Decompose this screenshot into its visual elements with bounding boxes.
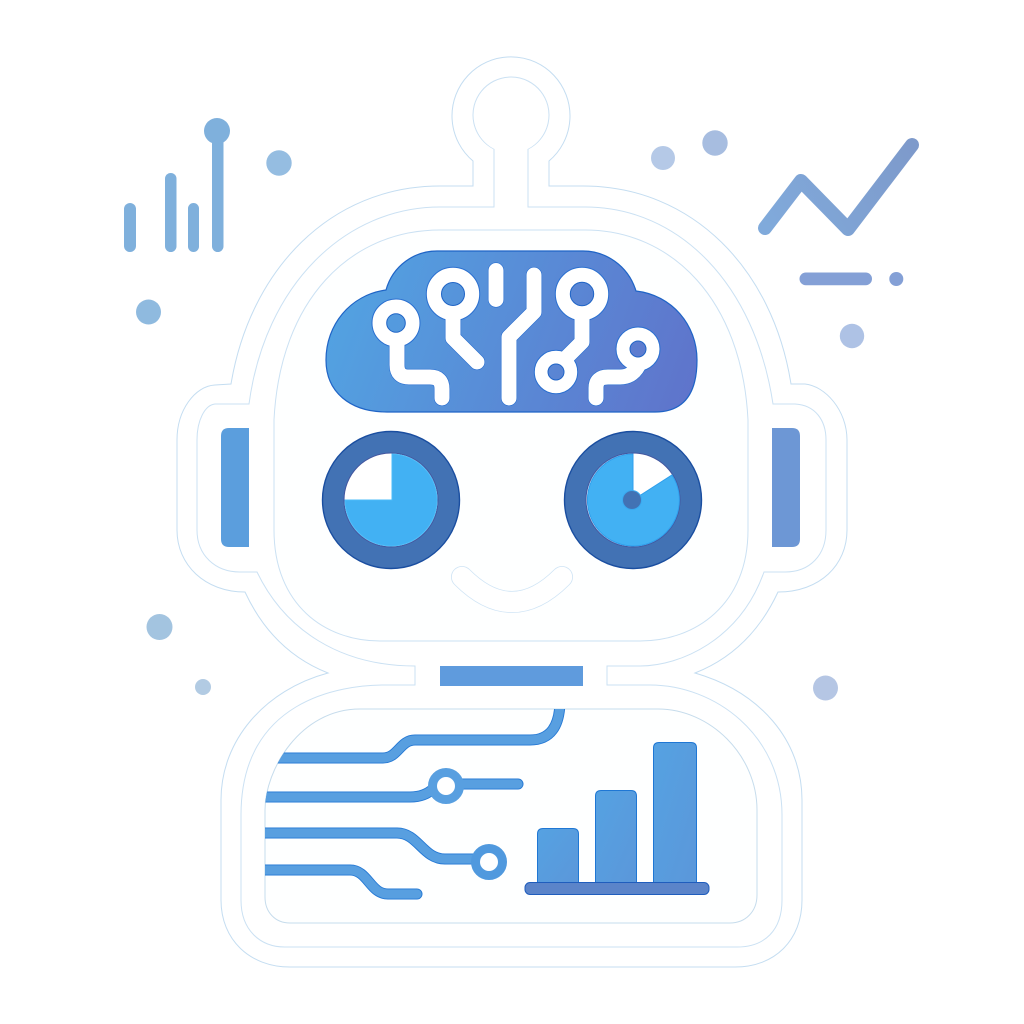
brain with circuit traces <box>326 251 697 412</box>
brain cloud shape <box>326 251 697 412</box>
signal bar 3 <box>188 203 199 252</box>
bar 3 <box>654 742 696 883</box>
circuit line edges <box>250 700 560 894</box>
right eye pie slice <box>587 454 679 546</box>
dot top right 1 <box>651 146 675 170</box>
dot top left <box>266 150 292 176</box>
small dot <box>889 272 903 286</box>
body panel <box>265 709 757 923</box>
right eye dial <box>586 453 680 547</box>
left eye dial <box>344 453 438 547</box>
smile <box>462 577 562 602</box>
dot top right 2 <box>702 130 728 156</box>
bar 1 <box>538 828 578 883</box>
illustration: robot with data motifs <box>124 56 919 968</box>
signal bar 2 <box>165 173 176 252</box>
left ear bar <box>221 428 249 547</box>
circuit node upper <box>432 772 460 800</box>
circuit node holes <box>387 282 646 380</box>
dash <box>800 272 872 285</box>
left eye ring <box>322 432 460 568</box>
chart baseline <box>525 882 709 894</box>
left eye: pie gauge <box>322 432 460 568</box>
head face panel <box>274 230 748 641</box>
dot mid right <box>840 324 864 348</box>
dot lower right <box>813 676 838 700</box>
right eye: pie gauge <box>564 432 702 568</box>
smile outline <box>462 577 562 602</box>
decor: dash and dot <box>800 272 903 286</box>
decor: trend line <box>765 145 912 229</box>
signal bar knob <box>204 118 230 144</box>
robot second outline <box>197 77 826 947</box>
right eye ring <box>564 432 702 568</box>
signal bar 1 <box>124 203 136 252</box>
circuit traces <box>397 270 640 398</box>
circuit trace edges <box>397 270 640 398</box>
circuit node outer discs <box>372 267 660 394</box>
neck bar <box>440 666 583 686</box>
decor: left signal bars <box>124 118 230 252</box>
circuit line fills <box>250 700 560 894</box>
left eye pie slice <box>345 454 437 546</box>
dot lower left <box>146 614 172 640</box>
body bar chart <box>525 742 709 894</box>
bar 2 <box>596 790 636 883</box>
right eye centre dot <box>622 490 642 510</box>
dot mid left <box>136 300 161 324</box>
body circuit lines <box>250 700 560 894</box>
right ear bar <box>772 428 800 547</box>
antenna inner fill <box>474 79 548 153</box>
dot small lower left <box>195 679 211 695</box>
circuit node lower <box>476 848 502 876</box>
robot outer outline <box>177 57 847 967</box>
signal bar 4 <box>212 135 224 252</box>
smile fill <box>462 577 562 602</box>
decor: floating dots <box>136 130 864 701</box>
